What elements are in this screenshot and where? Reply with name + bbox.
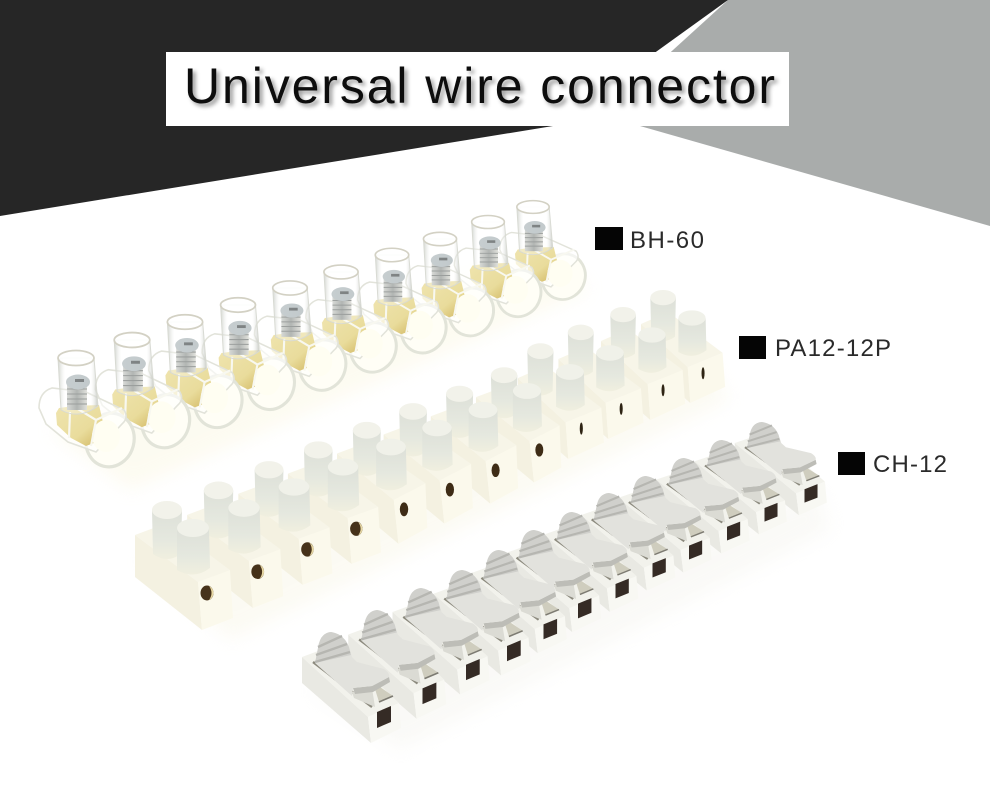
label: BH-60: BH-60 <box>630 227 704 254</box>
label: CH-12 <box>838 451 947 478</box>
connector: CH-12 spring lever strip <box>302 422 827 743</box>
title: Universal wire connector <box>184 58 775 114</box>
title banner <box>166 52 789 126</box>
background: dark corner panel <box>0 0 728 216</box>
label: BH-60 <box>595 227 704 254</box>
background: gray corner panel <box>640 0 990 226</box>
label: PA12-12P: PA12-12P <box>775 335 891 362</box>
connector: BH-60 clear strip <box>39 201 590 472</box>
label: CH-12: CH-12 <box>873 451 947 478</box>
soft glow beneath connectors <box>50 250 830 750</box>
connector: PA12-12P nylon strip <box>135 290 725 630</box>
